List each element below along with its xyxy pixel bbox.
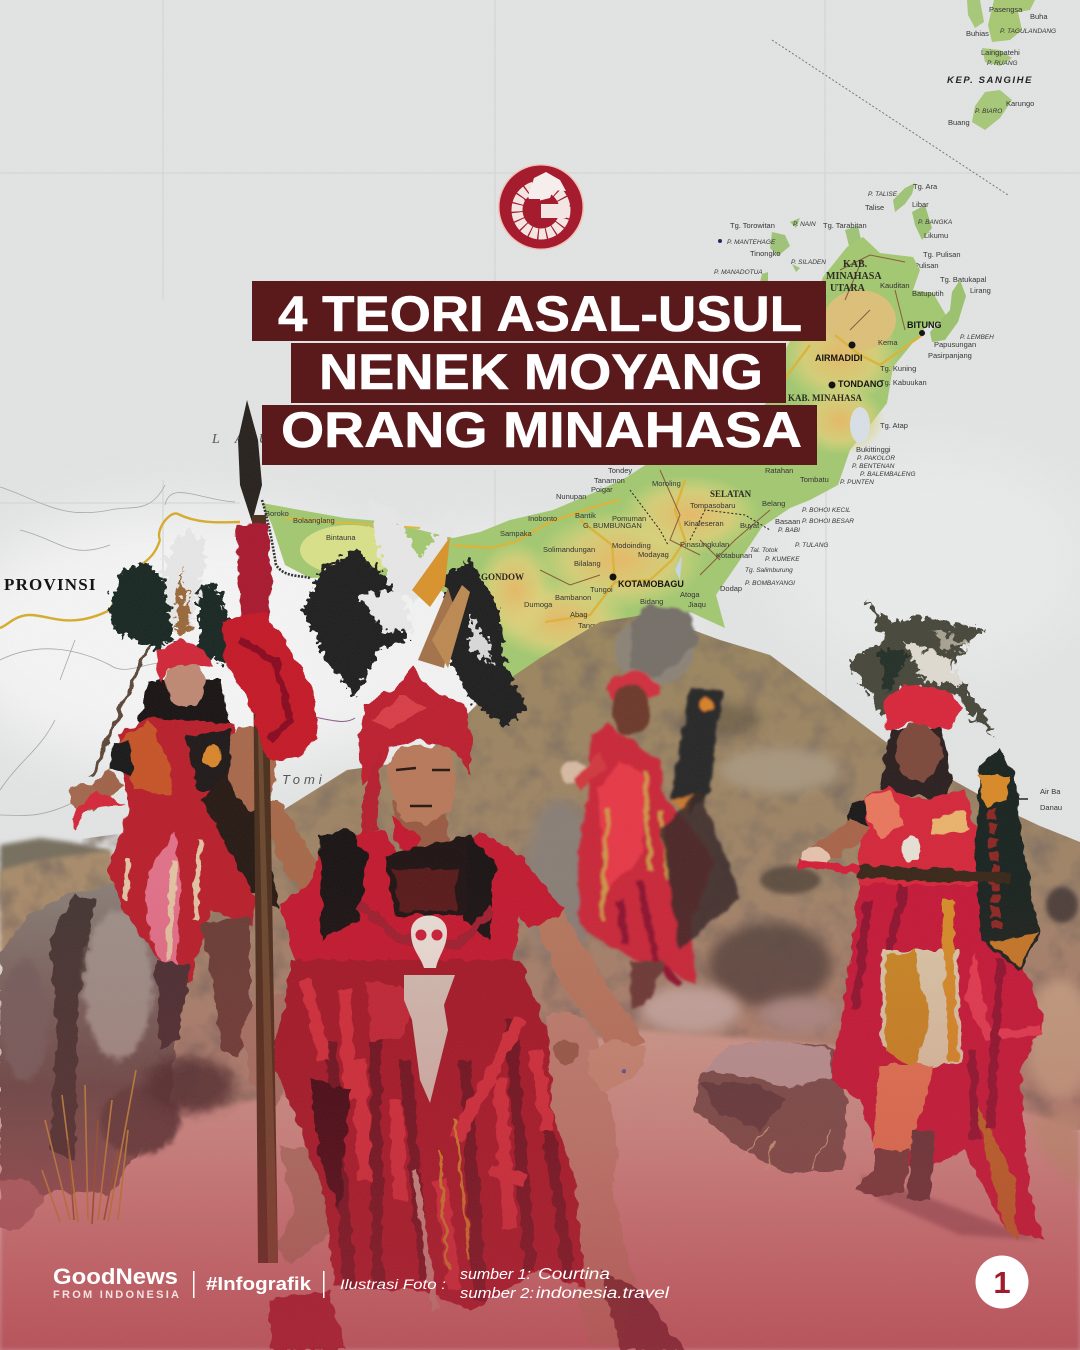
map: Minahasa peninsula: Kema [878,338,898,347]
map: northern small islands: P. BANGKA [918,219,952,226]
map: Minahasa peninsula: Abag [570,610,588,619]
map: northern small islands: P. TALISE [868,191,898,198]
map: Minahasa peninsula: Batuputih [912,289,944,298]
skull [902,835,922,861]
title: ORANG MINAHASA [281,402,802,458]
body [108,718,255,990]
arm [80,770,124,810]
map: Minahasa peninsula: TONDANO [838,379,883,389]
photo: dry grass [42,1070,136,1224]
map: northern islands Sangihe: Karungo [1006,99,1034,108]
map: Minahasa peninsula: Bukittinggi [856,445,891,454]
map: northern islands Sangihe: Buha [1030,12,1048,21]
map: Minahasa peninsula: Dumoga [524,600,553,609]
map: Minahasa peninsula: Pomuman [612,514,646,523]
map: Minahasa peninsula: Basaan [775,517,800,526]
map: Minahasa peninsula: Tondey [608,466,632,475]
logo [498,164,584,250]
legs [855,1150,910,1195]
figure: right woman [798,600,1045,1240]
map: Minahasa peninsula: Jiaqu [688,600,706,609]
map: Minahasa peninsula: Pinasungkulan [680,540,729,549]
map: Minahasa peninsula [262,237,976,690]
map: western province area: L A U [211,432,275,447]
photo: sandy ground [0,1030,1080,1350]
red collar tie [392,815,420,860]
map: Minahasa peninsula: Ratahan [765,466,793,475]
map: Minahasa peninsula: Bidang [640,597,663,606]
title: 4 TEORI ASAL-USUL [278,286,802,342]
map: Minahasa peninsula: SELATAN [710,489,752,499]
sword [858,865,1012,884]
headband [155,637,214,683]
map: Minahasa peninsula: P. BOHOI KECIL [802,507,851,514]
left shin [275,1147,340,1265]
shadow strip by right leg [600,1270,684,1350]
map: Minahasa peninsula: P. PUNTEN [840,479,874,486]
red gradient overlay [0,880,1080,1350]
map: Minahasa peninsula: Tompasobaru [690,501,735,510]
body layers [228,667,684,1350]
map: Minahasa peninsula: KOTAMOBAGU [618,579,684,589]
map: Minahasa peninsula: P. BALEMBALENG [860,471,916,478]
map: Minahasa peninsula: Tal. Totok [750,547,778,554]
map: Minahasa peninsula: Modayag [638,550,669,559]
skirt [830,880,1045,1240]
map: Minahasa peninsula: MINAHASA [826,271,882,282]
spear [91,647,148,777]
map: Minahasa peninsula: P. TULANG [795,542,828,549]
map: Minahasa peninsula: Solimandungan [543,545,595,554]
map: Minahasa peninsula: KAB. [843,259,868,270]
map: Minahasa peninsula: UTARA [830,283,866,294]
legs [200,915,250,1057]
map: northern islands Sangihe [947,0,1056,130]
map: northern islands Sangihe: Pasengsa [989,5,1023,14]
map: northern islands Sangihe: KEP. SANGIHE [947,75,1033,86]
spear [222,400,316,1263]
map: northern islands Sangihe: P. TAGULANDANG [1000,28,1056,35]
map: Minahasa peninsula: Tg. Salimburung [745,567,793,574]
hashtag: #Infografik [206,1274,312,1294]
map: Minahasa peninsula: Poigar [591,485,613,494]
feather crown [107,530,234,665]
map: northern small islands: Tg. Batukapal [940,275,987,284]
photo sources: sumber 1: [460,1267,531,1283]
left knee [241,993,296,1110]
black sash [975,748,1040,972]
map: Minahasa peninsula: G. BUMBUNGAN [583,521,642,530]
map: Minahasa peninsula: Tanoyan [578,621,606,630]
brand: FROM INDONESIA [53,1289,179,1301]
map: Minahasa peninsula: Kauditan [880,281,910,290]
page number badge: 1 [993,1265,1011,1300]
map: northern small islands: P. SILADEN [791,259,826,266]
map: Minahasa peninsula: Atoga [680,590,700,599]
map: Minahasa peninsula: Tg. Atap [880,421,908,430]
map: Minahasa peninsula: Tg. Kabuukan [880,378,927,387]
hair and face [880,726,952,800]
map: Minahasa peninsula: Tg. Kuning [880,364,916,373]
feather crown [850,600,995,738]
photo sources: indonesia.travel [536,1285,670,1302]
map: Minahasa peninsula: AIRMADIDI [815,353,862,363]
map: Minahasa peninsula: KAB. MINAHASA [788,393,863,403]
map: northern small islands: Tg. Torowitan [730,221,775,230]
map: Minahasa peninsula: P. BENTENAN [852,463,895,470]
map: Minahasa peninsula: Belang [762,499,785,508]
photo: central hill [0,600,1080,1130]
map: western province area: Air Ba [1040,787,1061,796]
map: Minahasa peninsula: P. BABI [778,527,800,534]
shirt and torso [280,830,565,975]
figure: left woman [69,530,280,1057]
hair [138,680,232,735]
map: Minahasa peninsula: Kinaleseran [684,519,724,528]
title: NENEK MOYANG [319,344,763,400]
map: Minahasa peninsula: Sampaka [500,529,533,538]
photo: far hills [0,838,130,960]
map: northern small islands: Tinongko [750,249,781,258]
face [386,745,457,826]
title [252,281,826,465]
map: northern small islands: Tg. Pulisan [923,250,961,259]
map: northern small islands: Tg. Ara [913,182,938,191]
map: Minahasa peninsula: P. BOMBAYANGI [745,580,795,587]
red tassel [222,612,316,760]
map: Minahasa peninsula: BITUNG [907,320,942,330]
map: Minahasa peninsula: Buyat [740,521,760,530]
brand: GoodNews [53,1264,178,1289]
photo: left boulders [0,884,235,1230]
map: northern islands Sangihe: Buhias [966,29,989,38]
map: northern islands Sangihe: P. RUANG [987,60,1018,67]
map: Minahasa peninsula: Kotabunan [716,551,752,560]
map: northern small islands: P. NAIN [793,221,816,228]
map: northern islands Sangihe: Laingpatehi [981,48,1020,57]
red head wrap [358,667,472,785]
face details [396,768,450,806]
map: northern small islands: Likumu [924,231,948,240]
map: Minahasa peninsula: P. BOHOI BESAR [802,518,854,525]
ragged red skirt [270,960,585,1350]
map: Minahasa peninsula: Modoinding [612,541,651,550]
footer credits [53,1264,670,1302]
map: Minahasa peninsula: Tanamon [594,476,625,485]
right leg [548,1012,634,1345]
map: Minahasa peninsula: Moroling [652,479,681,488]
map: northern small islands: Libar [912,200,929,209]
map: northern small islands: Lirang [970,286,991,295]
map: Minahasa peninsula: P. KUMEKE [765,556,800,563]
map: northern small islands: Talise [865,203,884,212]
neck [392,800,450,850]
page number badge [976,1256,1028,1308]
photo sources: sumber 2: [460,1286,534,1302]
map: northern small islands: P. MANADOTUA [714,269,763,276]
map: Minahasa peninsula: Bilalang [574,559,601,568]
map: Minahasa peninsula: Nunupan [556,492,586,501]
arm and hand [812,818,872,860]
map: Minahasa peninsula: Tombatu [800,475,829,484]
photo sources: Courtina [538,1266,610,1283]
map: western province area [0,432,1062,816]
map: Minahasa peninsula: Bolaanglang [293,516,335,525]
map: Minahasa peninsula: Papusungan [934,340,976,349]
photo sources [460,1266,670,1302]
feather headdress [303,500,528,727]
map: Minahasa peninsula: Bambanon [555,593,591,602]
map: Minahasa peninsula: GONDOW [481,572,524,582]
map: Minahasa peninsula: Tungoi [590,585,613,594]
map: northern islands Sangihe: Buang [948,118,970,127]
raised arm [252,800,322,898]
map: Minahasa peninsula: Inobonto [528,514,557,523]
map: Minahasa peninsula: Boroko [265,509,289,518]
figure: foreground man [222,400,684,1350]
map: Minahasa peninsula: Bintauna [326,533,356,542]
brand [53,1264,179,1301]
map: northern islands Sangihe: P. BIARO [975,108,1002,115]
map: Minahasa peninsula: Bantik [575,511,596,520]
map: northern small islands [714,182,994,341]
photo credit label: Ilustrasi Foto : [340,1277,446,1292]
right arm [530,905,646,1050]
map: northern small islands: Pulisan [914,261,939,270]
photo: right boulder [693,1040,848,1172]
map: Minahasa peninsula: P. PAKOLOR [857,455,895,462]
map: northern small islands: P. LEMBEH [960,334,994,341]
map: Minahasa peninsula: Pasirpanjang [928,351,972,360]
map: western province area: Tomi [282,772,326,787]
map: western province area: Danau [1040,803,1062,812]
map: western province area: PROVINSI [4,575,97,594]
bodice [858,786,1005,885]
animal skull ornament [404,916,455,1103]
map: northern small islands: P. MANTEHAGE [727,239,776,246]
map: Minahasa peninsula: Dodap [720,584,742,593]
map: northern small islands: Tg. Tarabitan [823,221,867,230]
figure: blurred woman in background [559,606,740,1010]
